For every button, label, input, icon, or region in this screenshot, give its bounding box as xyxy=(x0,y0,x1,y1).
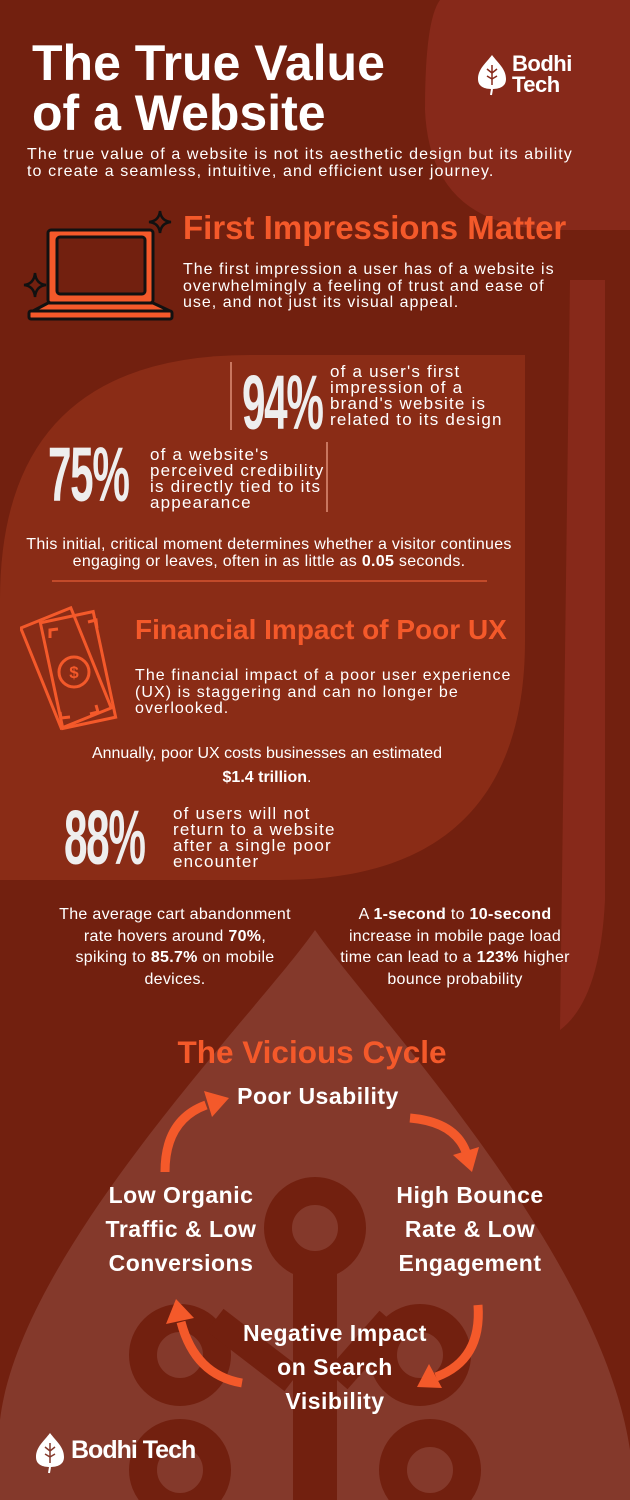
node: high bounce: Rate & Low xyxy=(405,1216,535,1242)
logo top: Bodhi xyxy=(512,51,572,76)
text: financial xyxy=(135,667,511,717)
stat: 75%: of a website's xyxy=(150,445,269,464)
icon: leaf logo bottom xyxy=(36,1433,64,1474)
logo top xyxy=(478,51,572,97)
text: critical moment: engaging or leaves, often in as little as 0.05 seconds. xyxy=(73,552,465,570)
stat: 75%: appearance xyxy=(150,493,252,512)
stat: 94%: 94% xyxy=(242,359,323,446)
text: cart abandonment: spiking to 85.7% on mobile xyxy=(75,949,275,966)
stat: 88%: of users will not xyxy=(173,804,311,823)
text: page load xyxy=(340,906,570,988)
text: annually xyxy=(92,745,442,786)
text: cart abandonment xyxy=(59,906,291,988)
stat: 94%: of a user's first xyxy=(330,362,460,381)
text: first impression: overwhelmingly a feeling of trust and ease of xyxy=(183,278,545,294)
node: low organic: Conversions xyxy=(109,1250,253,1276)
text: page load: time can lead to a 123% higher xyxy=(340,949,570,966)
node: low organic: Low Organic xyxy=(109,1182,253,1208)
text: page load: increase in mobile page load xyxy=(349,928,561,944)
intro text: The true value of a website is not its aesthetic design but its ability xyxy=(27,146,573,163)
text: first impression xyxy=(183,261,555,311)
node: high bounce: High Bounce xyxy=(396,1182,544,1208)
stat: 94%: brand's website is xyxy=(330,394,486,413)
text: annually: Annually, poor UX costs businesses an estimated xyxy=(92,745,442,762)
text: page load: A 1-second to 10-second xyxy=(359,906,551,923)
node: low organic: Traffic & Low xyxy=(106,1216,256,1242)
stat: 88%: 88% xyxy=(64,794,145,881)
node: poor usability: Poor Usability xyxy=(237,1083,399,1109)
text: cart abandonment: rate hovers around 70%, xyxy=(84,928,266,944)
text: annually: $1.4 trillion. xyxy=(223,769,311,786)
stat: 88% xyxy=(64,794,336,881)
text: critical moment: This initial, critical moment determines whether a visitor continues xyxy=(26,536,512,553)
node: high bounce xyxy=(396,1182,544,1276)
node: low organic xyxy=(106,1182,256,1276)
stat: 75%: 75% xyxy=(48,431,129,518)
heading: financial impact: Financial Impact of Poor UX xyxy=(135,614,507,645)
heading: first impressions: First Impressions Matter xyxy=(183,209,566,246)
text: financial: overlooked. xyxy=(135,700,229,717)
node: negative impact xyxy=(243,1320,427,1414)
logo bottom: Bodhi Tech xyxy=(71,1436,195,1464)
title xyxy=(32,35,385,141)
heading: vicious cycle: The Vicious Cycle xyxy=(177,1034,447,1070)
cycle diagram xyxy=(106,1083,544,1414)
stat: 94%: related to its design xyxy=(330,410,503,429)
stat: 75% xyxy=(48,431,328,518)
node: negative impact: on Search xyxy=(277,1354,393,1380)
icon: leaf logo xyxy=(478,55,506,96)
logo bottom xyxy=(36,1433,195,1474)
node: negative impact: Visibility xyxy=(285,1388,385,1414)
node: high bounce: Engagement xyxy=(398,1250,542,1276)
text: cart abandonment: The average cart abandonment xyxy=(59,906,291,923)
stat: 94%: impression of a xyxy=(330,378,463,397)
text: page load: bounce probability xyxy=(387,970,523,988)
icon: money xyxy=(20,606,118,730)
text: financial: (UX) is staggering and can no longer be xyxy=(135,684,459,700)
text: first impression: The first impression a user has of a website is xyxy=(183,261,555,278)
logo top: Tech xyxy=(512,72,560,97)
intro text xyxy=(27,146,573,180)
stat: 88%: encounter xyxy=(173,852,259,871)
icon: laptop xyxy=(24,210,174,320)
intro text: to create a seamless, intuitive, and efficient user journey. xyxy=(27,162,494,180)
node: negative impact: Negative Impact xyxy=(243,1320,427,1346)
stat: 88%: return to a website xyxy=(173,820,336,839)
icon: money: $ xyxy=(69,663,79,682)
stat: 94% xyxy=(230,359,503,446)
stat: 75%: is directly tied to its xyxy=(150,477,321,496)
stat: 75%: perceived credibility xyxy=(150,461,324,480)
text: cart abandonment: devices. xyxy=(144,970,206,988)
text: financial: The financial impact of a poor user experience xyxy=(135,667,511,684)
title: The True Value xyxy=(32,35,385,91)
text: first impression: use, and not just its visual appeal. xyxy=(183,294,459,311)
text: critical moment xyxy=(26,536,512,570)
stat: 88%: after a single poor xyxy=(173,836,332,855)
title: of a Website xyxy=(32,85,326,141)
